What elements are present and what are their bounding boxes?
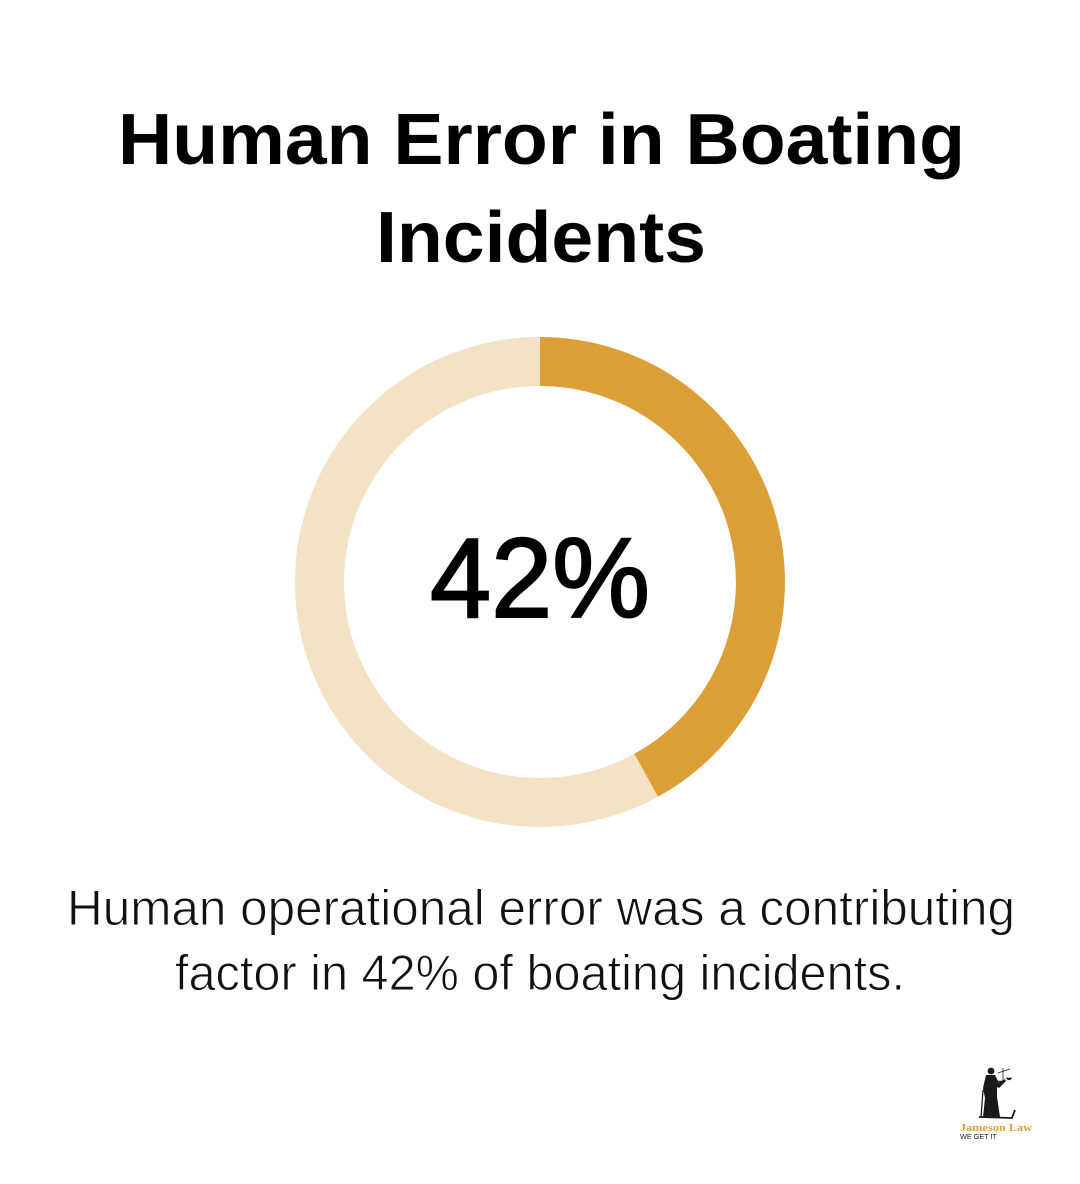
donut chart: 42% [320, 362, 760, 802]
description text [67, 880, 1015, 1001]
title: Human Error in Boating [118, 100, 965, 180]
title: Incidents [376, 198, 706, 278]
logo tagline: WE GET IT [960, 1134, 998, 1141]
donut value arc [540, 362, 760, 775]
description text: factor in 42% of boating incidents. [175, 945, 905, 1001]
description text: Human operational error was a contributing [67, 880, 1015, 936]
logo: Jameson Law [960, 1068, 1032, 1141]
donut track [320, 362, 760, 802]
icon: lady justice [979, 1068, 1015, 1118]
logo name: Jameson Law [960, 1123, 1032, 1134]
title [118, 100, 965, 278]
center value: 42% [430, 515, 650, 641]
